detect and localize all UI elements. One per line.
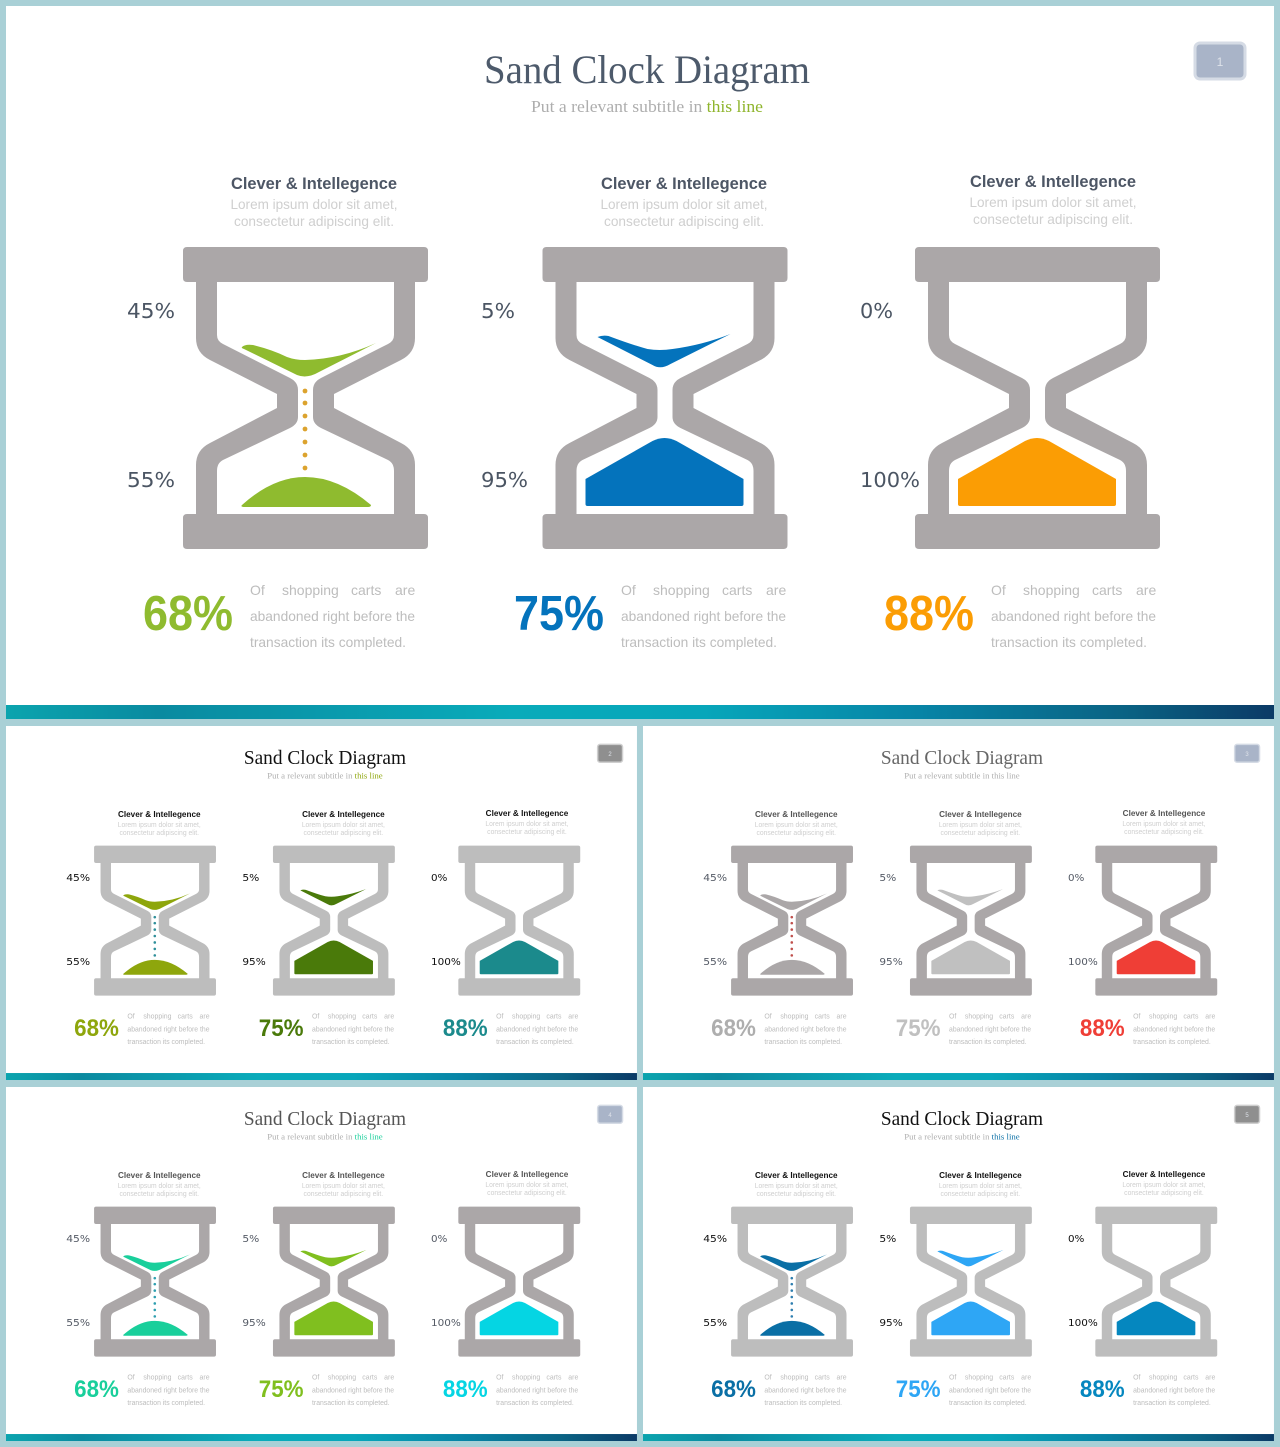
heading column 2: Lorem ipsum dolor sit amet, bbox=[302, 822, 385, 829]
stat 88%: are bbox=[568, 1013, 578, 1020]
heading column 1: Lorem ipsum dolor sit amet, bbox=[755, 1183, 838, 1190]
heading column 3: Lorem ipsum dolor sit amet, bbox=[1122, 1182, 1206, 1189]
subtitle: Put a relevant subtitle in this line bbox=[267, 1132, 383, 1142]
stat 68%: Of bbox=[250, 582, 265, 598]
stat 88%: transaction its completed. bbox=[1133, 1039, 1211, 1046]
stat 88% bbox=[1080, 1013, 1215, 1046]
stat 75%: 75% bbox=[896, 1015, 941, 1042]
page number badge bbox=[1235, 1105, 1260, 1123]
stat 75%: are bbox=[766, 582, 786, 598]
percent labels bbox=[703, 873, 1098, 968]
stat 88%: 88% bbox=[443, 1376, 488, 1403]
stat 88%: transaction its completed. bbox=[496, 1400, 574, 1407]
heading column 3: Lorem ipsum dolor sit amet, bbox=[485, 821, 569, 828]
hourglass sky blue bbox=[910, 1207, 1032, 1357]
stat 75%: abandoned right before the bbox=[312, 1026, 394, 1033]
stat 68%: 68% bbox=[711, 1376, 756, 1403]
heading column 3: Lorem ipsum dolor sit amet, bbox=[1122, 821, 1206, 828]
stat 68%: Of bbox=[127, 1013, 135, 1020]
heading column 2 bbox=[302, 809, 385, 837]
percent labels: 5% bbox=[242, 873, 259, 884]
heading column 1: Clever & Intellegence bbox=[755, 1170, 838, 1180]
stat 75%: transaction its completed. bbox=[312, 1039, 390, 1046]
slide 2 green variant bbox=[6, 726, 637, 1080]
stat 75%: shopping bbox=[965, 1013, 993, 1020]
hourglass green bbox=[183, 247, 428, 549]
percent labels: 95% bbox=[879, 957, 903, 968]
hourglass red bbox=[1095, 846, 1217, 996]
heading column 3: Lorem ipsum dolor sit amet, bbox=[970, 194, 1136, 210]
stat 88%: abandoned right before the bbox=[496, 1387, 578, 1394]
stat 68%: abandoned right before the bbox=[250, 608, 415, 624]
percent labels: 100% bbox=[1068, 1318, 1098, 1329]
percent labels bbox=[703, 1234, 1098, 1329]
page number badge: 2 bbox=[608, 752, 612, 758]
heading column 1: consectetur adipiscing elit. bbox=[119, 830, 199, 837]
page number badge bbox=[1235, 744, 1260, 762]
stat 68%: transaction its completed. bbox=[764, 1039, 842, 1046]
heading column 2: Lorem ipsum dolor sit amet, bbox=[939, 822, 1022, 829]
hourglass lime bbox=[273, 1207, 395, 1357]
heading column 2: Lorem ipsum dolor sit amet, bbox=[600, 196, 768, 212]
stat 75%: are bbox=[384, 1013, 394, 1020]
stat 88%: abandoned right before the bbox=[991, 608, 1156, 624]
stat 88%: 88% bbox=[443, 1015, 488, 1042]
stat 68%: Of bbox=[764, 1374, 772, 1381]
stat 75%: carts bbox=[362, 1374, 378, 1381]
heading column 1: Lorem ipsum dolor sit amet, bbox=[230, 196, 398, 212]
stat 88% bbox=[884, 582, 1156, 650]
stat 68%: shopping bbox=[282, 582, 339, 598]
title: Sand Clock Diagram bbox=[244, 747, 407, 769]
percent labels: 95% bbox=[481, 468, 528, 492]
heading column 2: consectetur adipiscing elit. bbox=[941, 830, 1020, 837]
percent labels bbox=[127, 299, 920, 492]
slide 3 grey and red variant bbox=[643, 726, 1274, 1080]
stat 88%: transaction its completed. bbox=[496, 1039, 574, 1046]
subtitle: Put a relevant subtitle in this line bbox=[904, 1132, 1020, 1142]
percent labels: 55% bbox=[66, 957, 90, 968]
stat 88%: carts bbox=[1183, 1013, 1199, 1020]
stat 75%: carts bbox=[362, 1013, 378, 1020]
stat 88%: are bbox=[1136, 582, 1156, 598]
heading column 2 bbox=[600, 174, 768, 229]
title: Sand Clock Diagram bbox=[244, 1108, 407, 1130]
heading column 1: Clever & Intellegence bbox=[118, 1170, 201, 1180]
heading column 3 bbox=[970, 172, 1136, 227]
stat 68%: Of bbox=[127, 1374, 135, 1381]
stat 75%: Of bbox=[949, 1374, 956, 1381]
heading column 2: consectetur adipiscing elit. bbox=[304, 1191, 383, 1198]
heading column 3: consectetur adipiscing elit. bbox=[973, 211, 1133, 227]
stat 68%: shopping bbox=[143, 1374, 172, 1381]
heading column 1: consectetur adipiscing elit. bbox=[234, 213, 394, 229]
heading column 2 bbox=[302, 1170, 385, 1198]
percent labels: 100% bbox=[431, 957, 461, 968]
percent labels: 45% bbox=[66, 1234, 90, 1245]
stat 88%: Of bbox=[496, 1013, 504, 1020]
stat 68%: transaction its completed. bbox=[127, 1039, 205, 1046]
stat 88%: are bbox=[1205, 1374, 1215, 1381]
page number badge: 4 bbox=[608, 1113, 612, 1119]
percent labels: 45% bbox=[703, 1234, 727, 1245]
percent labels: 45% bbox=[66, 873, 90, 884]
stat 88% bbox=[443, 1374, 578, 1407]
heading column 1: Lorem ipsum dolor sit amet, bbox=[755, 822, 838, 829]
stat 88%: 88% bbox=[1080, 1015, 1125, 1042]
heading column 3: Clever & Intellegence bbox=[1123, 1169, 1206, 1179]
heading column 3 bbox=[1122, 808, 1206, 836]
stat 68%: abandoned right before the bbox=[127, 1387, 210, 1394]
stat 68%: shopping bbox=[780, 1374, 809, 1381]
heading column 3: Clever & Intellegence bbox=[486, 808, 569, 818]
stat 75%: carts bbox=[999, 1013, 1015, 1020]
stat 88%: transaction its completed. bbox=[991, 634, 1147, 650]
stat 88%: 88% bbox=[884, 587, 974, 641]
heading column 3: consectetur adipiscing elit. bbox=[487, 829, 567, 836]
heading column 1 bbox=[755, 809, 838, 837]
heading column 2 bbox=[939, 809, 1022, 837]
percent labels: 100% bbox=[860, 468, 920, 492]
heading column 1 bbox=[230, 174, 398, 229]
percent labels: 55% bbox=[66, 1318, 90, 1329]
stat 68%: transaction its completed. bbox=[127, 1400, 205, 1407]
stat 75%: Of bbox=[312, 1013, 319, 1020]
percent labels: 100% bbox=[1068, 957, 1098, 968]
percent labels: 5% bbox=[879, 1234, 896, 1245]
title: Sand Clock Diagram bbox=[484, 47, 810, 92]
stat 68%: carts bbox=[178, 1013, 193, 1020]
heading column 1 bbox=[118, 809, 201, 837]
stat 88%: Of bbox=[1133, 1374, 1141, 1381]
stat 88%: carts bbox=[1092, 582, 1122, 598]
stat 75%: are bbox=[1021, 1374, 1031, 1381]
stat 88%: shopping bbox=[1149, 1013, 1177, 1020]
percent labels: 0% bbox=[431, 873, 447, 884]
heading column 1: consectetur adipiscing elit. bbox=[756, 1191, 836, 1198]
stat 68% bbox=[74, 1374, 210, 1407]
stat 88%: 88% bbox=[1080, 1376, 1125, 1403]
page number badge: 1 bbox=[1217, 55, 1224, 69]
heading column 3: consectetur adipiscing elit. bbox=[487, 1190, 567, 1197]
percent labels: 100% bbox=[431, 1318, 461, 1329]
stat 68%: abandoned right before the bbox=[764, 1026, 847, 1033]
stat 68%: carts bbox=[815, 1374, 830, 1381]
stat 75%: abandoned right before the bbox=[621, 608, 786, 624]
stat 68% bbox=[711, 1374, 847, 1407]
stat 68%: are bbox=[837, 1374, 847, 1381]
hourglass cyan bbox=[458, 1207, 580, 1357]
heading column 2: Lorem ipsum dolor sit amet, bbox=[939, 1183, 1022, 1190]
percent labels: 55% bbox=[127, 468, 175, 492]
page number badge bbox=[1195, 43, 1245, 79]
percent labels: 5% bbox=[879, 873, 896, 884]
percent labels: 0% bbox=[1068, 873, 1084, 884]
stat 75%: 75% bbox=[259, 1015, 304, 1042]
heading column 1: Clever & Intellegence bbox=[755, 809, 838, 819]
stat 75%: 75% bbox=[259, 1376, 304, 1403]
stat 75%: Of bbox=[312, 1374, 319, 1381]
stat 75%: are bbox=[384, 1374, 394, 1381]
percent labels: 45% bbox=[703, 873, 727, 884]
slide 1 large bbox=[6, 6, 1274, 719]
stat 68%: carts bbox=[815, 1013, 830, 1020]
stat 75%: shopping bbox=[328, 1374, 356, 1381]
percent labels: 0% bbox=[860, 299, 893, 323]
stat 68%: transaction its completed. bbox=[764, 1400, 842, 1407]
heading column 1 bbox=[118, 1170, 201, 1198]
percent labels: 95% bbox=[879, 1318, 903, 1329]
heading column 3 bbox=[485, 1169, 569, 1197]
stat 75% bbox=[514, 582, 786, 650]
heading column 3: consectetur adipiscing elit. bbox=[1124, 1190, 1204, 1197]
percent labels: 95% bbox=[242, 1318, 266, 1329]
stat 75% bbox=[259, 1374, 394, 1407]
percent labels: 95% bbox=[242, 957, 266, 968]
percent labels: 0% bbox=[431, 1234, 447, 1245]
heading column 2: Clever & Intellegence bbox=[939, 1170, 1022, 1180]
percent labels: 5% bbox=[481, 299, 515, 323]
stat 75%: transaction its completed. bbox=[621, 634, 777, 650]
stat 75% bbox=[259, 1013, 394, 1046]
heading column 3: consectetur adipiscing elit. bbox=[1124, 829, 1204, 836]
stat 75% bbox=[896, 1013, 1031, 1046]
stat 88%: abandoned right before the bbox=[1133, 1387, 1215, 1394]
stat 75%: shopping bbox=[328, 1013, 356, 1020]
stat 75%: Of bbox=[949, 1013, 956, 1020]
stat 88%: transaction its completed. bbox=[1133, 1400, 1211, 1407]
title: Sand Clock Diagram bbox=[881, 747, 1044, 769]
stat 75%: transaction its completed. bbox=[949, 1039, 1027, 1046]
percent labels: 0% bbox=[1068, 1234, 1084, 1245]
heading column 2: consectetur adipiscing elit. bbox=[604, 213, 764, 229]
heading column 3: Lorem ipsum dolor sit amet, bbox=[485, 1182, 569, 1189]
stat 75%: shopping bbox=[653, 582, 710, 598]
stat 68%: shopping bbox=[780, 1013, 809, 1020]
stat 75%: carts bbox=[999, 1374, 1015, 1381]
stat 68%: are bbox=[837, 1013, 847, 1020]
stat 88% bbox=[1080, 1374, 1215, 1407]
stat 88%: are bbox=[568, 1374, 578, 1381]
heading column 3: Clever & Intellegence bbox=[970, 172, 1136, 191]
title: Sand Clock Diagram bbox=[881, 1108, 1044, 1130]
stat 88%: carts bbox=[546, 1013, 562, 1020]
stat 68%: 68% bbox=[74, 1376, 119, 1403]
heading column 3: Clever & Intellegence bbox=[486, 1169, 569, 1179]
stat 88%: are bbox=[1205, 1013, 1215, 1020]
heading column 2: Clever & Intellegence bbox=[302, 809, 385, 819]
stat 75%: carts bbox=[722, 582, 752, 598]
stat 88%: Of bbox=[496, 1374, 504, 1381]
stat 68%: are bbox=[395, 582, 415, 598]
stat 68% bbox=[74, 1013, 210, 1046]
stat 68%: are bbox=[200, 1013, 210, 1020]
stat 88%: Of bbox=[1133, 1013, 1141, 1020]
percent labels bbox=[66, 1234, 461, 1329]
heading column 1: consectetur adipiscing elit. bbox=[756, 830, 836, 837]
page number badge: 3 bbox=[1245, 752, 1249, 758]
stat 75%: abandoned right before the bbox=[312, 1387, 394, 1394]
stat 75%: transaction its completed. bbox=[949, 1400, 1027, 1407]
stat 68%: 68% bbox=[143, 587, 233, 641]
stat 88%: shopping bbox=[1023, 582, 1080, 598]
heading column 3: Clever & Intellegence bbox=[1123, 808, 1206, 818]
stat 75% bbox=[896, 1374, 1031, 1407]
stat 75%: 75% bbox=[896, 1376, 941, 1403]
heading column 2: Clever & Intellegence bbox=[302, 1170, 385, 1180]
stat 68%: carts bbox=[178, 1374, 193, 1381]
heading column 1: consectetur adipiscing elit. bbox=[119, 1191, 199, 1198]
heading column 1: Lorem ipsum dolor sit amet, bbox=[118, 1183, 201, 1190]
hourglass olive bbox=[94, 846, 216, 996]
stat 68%: 68% bbox=[711, 1015, 756, 1042]
slide 5 blue variant bbox=[643, 1087, 1274, 1441]
hourglass orange bbox=[915, 247, 1160, 549]
percent labels: 5% bbox=[242, 1234, 259, 1245]
stat 68%: carts bbox=[351, 582, 381, 598]
hourglass ocean blue bbox=[1095, 1207, 1217, 1357]
stat 68%: 68% bbox=[74, 1015, 119, 1042]
stat 88%: shopping bbox=[1149, 1374, 1177, 1381]
stat 75%: 75% bbox=[514, 587, 604, 641]
percent labels: 55% bbox=[703, 1318, 727, 1329]
hourglass teal bbox=[458, 846, 580, 996]
percent labels: 55% bbox=[703, 957, 727, 968]
page number badge bbox=[598, 744, 623, 762]
heading column 2: Clever & Intellegence bbox=[939, 809, 1022, 819]
stat 68% bbox=[143, 582, 415, 650]
heading column 1: Clever & Intellegence bbox=[118, 809, 201, 819]
heading column 2: consectetur adipiscing elit. bbox=[304, 830, 383, 837]
heading column 3 bbox=[1122, 1169, 1206, 1197]
stat 88%: shopping bbox=[512, 1013, 540, 1020]
hourglass light grey bbox=[910, 846, 1032, 996]
percent labels: 45% bbox=[127, 299, 175, 323]
stat 88%: shopping bbox=[512, 1374, 540, 1381]
heading column 1: Lorem ipsum dolor sit amet, bbox=[118, 822, 201, 829]
stat 88%: carts bbox=[546, 1374, 562, 1381]
stat 68%: abandoned right before the bbox=[127, 1026, 210, 1033]
stat 88% bbox=[443, 1013, 578, 1046]
percent labels bbox=[66, 873, 461, 968]
subtitle: Put a relevant subtitle in this line bbox=[531, 97, 763, 116]
stat 68%: shopping bbox=[143, 1013, 172, 1020]
heading column 1 bbox=[755, 1170, 838, 1198]
hourglass grey bbox=[731, 846, 853, 996]
heading column 2: Lorem ipsum dolor sit amet, bbox=[302, 1183, 385, 1190]
stat 75%: abandoned right before the bbox=[949, 1387, 1031, 1394]
stat 88%: abandoned right before the bbox=[1133, 1026, 1215, 1033]
stat 75%: are bbox=[1021, 1013, 1031, 1020]
hourglass dark blue bbox=[731, 1207, 853, 1357]
hourglass dark green bbox=[273, 846, 395, 996]
slide 4 mint variant bbox=[6, 1087, 637, 1441]
hourglass blue bbox=[542, 247, 788, 549]
stat 88%: Of bbox=[991, 582, 1006, 598]
heading column 2 bbox=[939, 1170, 1022, 1198]
hourglass mint bbox=[94, 1207, 216, 1357]
heading column 3 bbox=[485, 808, 569, 836]
stat 75%: transaction its completed. bbox=[312, 1400, 390, 1407]
page number badge bbox=[598, 1105, 623, 1123]
stat 88%: carts bbox=[1183, 1374, 1199, 1381]
page number badge: 5 bbox=[1245, 1113, 1249, 1119]
heading column 1: Clever & Intellegence bbox=[231, 174, 397, 193]
heading column 2: consectetur adipiscing elit. bbox=[941, 1191, 1020, 1198]
stat 68%: Of bbox=[764, 1013, 772, 1020]
stat 75%: Of bbox=[621, 582, 636, 598]
subtitle: Put a relevant subtitle in this line bbox=[267, 771, 383, 781]
stat 75%: abandoned right before the bbox=[949, 1026, 1031, 1033]
stat 68%: transaction its completed. bbox=[250, 634, 406, 650]
heading column 2: Clever & Intellegence bbox=[601, 174, 767, 193]
stat 88%: abandoned right before the bbox=[496, 1026, 578, 1033]
subtitle: Put a relevant subtitle in this line bbox=[904, 771, 1020, 781]
stat 68%: abandoned right before the bbox=[764, 1387, 847, 1394]
stat 75%: shopping bbox=[965, 1374, 993, 1381]
stat 68%: are bbox=[200, 1374, 210, 1381]
stat 68% bbox=[711, 1013, 847, 1046]
